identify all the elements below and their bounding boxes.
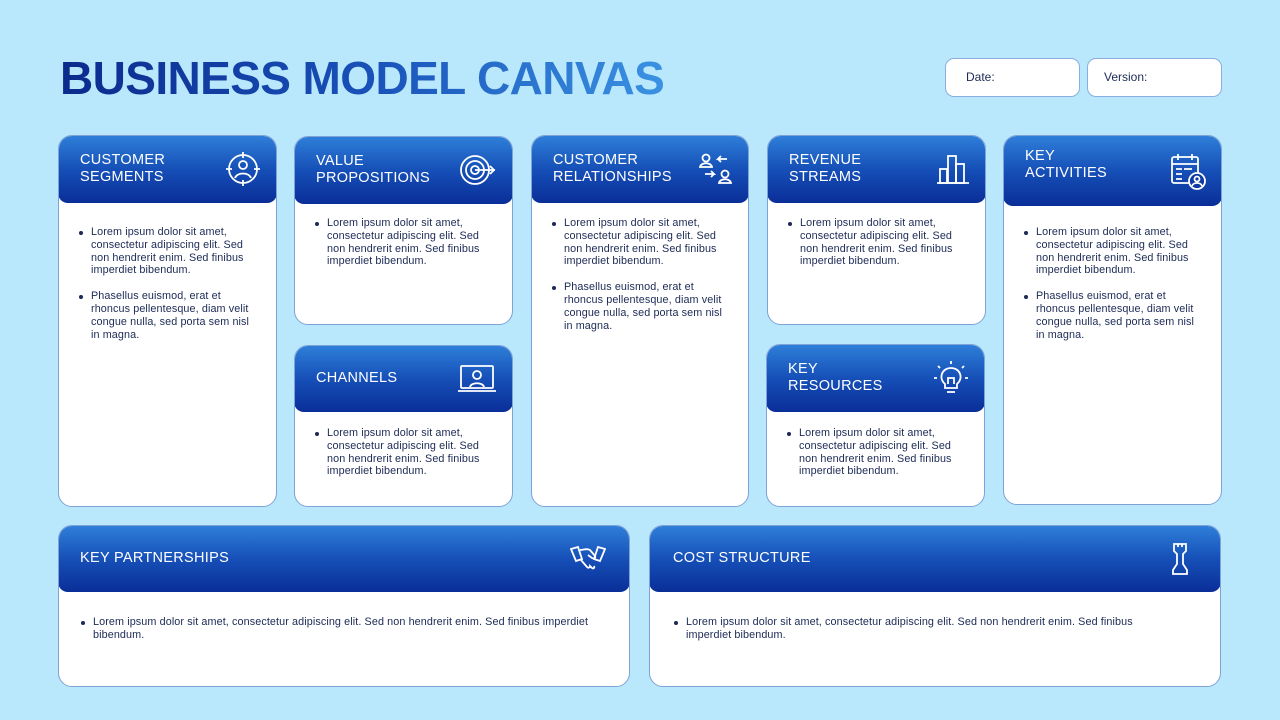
header: key activities: KEY xyxy=(1025,148,1055,164)
text: key activities: Lorem ipsum dolor sit amet, consectetur adipiscing elit. Sed non hendrerit enim. Sed finibus imperdiet bibendum. xyxy=(1036,226,1189,276)
text: customer relationships: Lorem ipsum dolor sit amet, consectetur adipiscing elit. Sed non hendrerit enim. Sed finibus imperdiet bibendum. xyxy=(564,217,717,267)
header: value propositions xyxy=(294,136,513,204)
header: cost structure xyxy=(649,525,1221,592)
header: customer relationships: CUSTOMER xyxy=(553,152,638,168)
header: key partnerships: KEY PARTNERSHIPS xyxy=(80,550,229,566)
header: key resources: RESOURCES xyxy=(788,378,883,394)
header: revenue streams xyxy=(767,135,986,203)
header: channels: CHANNELS xyxy=(316,370,397,386)
version field: Version: xyxy=(1104,70,1147,84)
panel: key activities xyxy=(1003,135,1222,505)
header: customer relationships: RELATIONSHIPS xyxy=(553,169,672,185)
text: key partnerships: Lorem ipsum dolor sit amet, consectetur adipiscing elit. Sed non hendrerit enim. Sed finibus imperdiet bibendum. xyxy=(93,616,588,641)
text: key activities xyxy=(1024,226,1194,341)
text: customer segments: Lorem ipsum dolor sit amet, consectetur adipiscing elit. Sed non hendrerit enim. Sed finibus imperdiet bibendum. xyxy=(91,226,244,276)
header: customer segments: SEGMENTS xyxy=(80,169,164,185)
text: key activities: Phasellus euismod, erat et rhoncus pellentesque, diam velit congue nulla, sed porta sem nisl in magna. xyxy=(1036,290,1194,341)
header: key resources xyxy=(766,344,985,412)
header: value propositions: VALUE xyxy=(316,153,364,169)
header: revenue streams: REVENUE xyxy=(789,152,861,168)
version field xyxy=(1087,58,1222,97)
text: channels: Lorem ipsum dolor sit amet, consectetur adipiscing elit. Sed non hendrerit enim. Sed finibus imperdiet bibendum. xyxy=(327,427,480,477)
header: key partnerships xyxy=(58,525,630,592)
text: cost structure: Lorem ipsum dolor sit amet, consectetur adipiscing elit. Sed non hendrerit enim. Sed finibus imperdiet bibendum. xyxy=(686,616,1133,641)
panel: customer relationships xyxy=(531,135,749,507)
panel: customer segments xyxy=(58,135,277,507)
text: revenue streams: Lorem ipsum dolor sit amet, consectetur adipiscing elit. Sed non hendrerit enim. Sed finibus imperdiet bibendum. xyxy=(800,217,953,267)
header: customer relationships xyxy=(531,135,749,203)
header: customer segments xyxy=(58,135,277,203)
text: key resources: Lorem ipsum dolor sit amet, consectetur adipiscing elit. Sed non hendrerit enim. Sed finibus imperdiet bibendum. xyxy=(799,427,952,477)
panel: channels xyxy=(294,345,513,507)
text: customer segments xyxy=(79,226,249,341)
header: key activities: ACTIVITIES xyxy=(1025,164,1107,180)
header: key resources: KEY xyxy=(788,361,818,377)
header: channels xyxy=(294,345,513,412)
panel: revenue streams xyxy=(767,135,986,325)
text: customer relationships xyxy=(552,217,722,332)
header: cost structure: COST STRUCTURE xyxy=(673,550,811,566)
text: customer segments: Phasellus euismod, erat et rhoncus pellentesque, diam velit congue nulla, sed porta sem nisl in magna. xyxy=(91,290,249,341)
header: value propositions: PROPOSITIONS xyxy=(316,170,430,186)
panel: key partnerships xyxy=(58,525,630,687)
text: customer relationships: Phasellus euismod, erat et rhoncus pellentesque, diam velit congue nulla, sed porta sem nisl in magna. xyxy=(564,281,722,332)
panel: value propositions xyxy=(294,136,513,325)
panel: key resources xyxy=(766,344,985,507)
header: revenue streams: STREAMS xyxy=(789,169,861,185)
date field: Date: xyxy=(966,70,995,84)
header: customer segments: CUSTOMER xyxy=(80,152,165,168)
header: key activities xyxy=(1003,135,1222,206)
date field xyxy=(945,58,1080,97)
text: value propositions: Lorem ipsum dolor sit amet, consectetur adipiscing elit. Sed non hendrerit enim. Sed finibus imperdiet bibendum. xyxy=(327,217,480,267)
title: BUSINESS MODEL CANVAS xyxy=(60,52,664,104)
panel: cost structure xyxy=(649,525,1221,687)
